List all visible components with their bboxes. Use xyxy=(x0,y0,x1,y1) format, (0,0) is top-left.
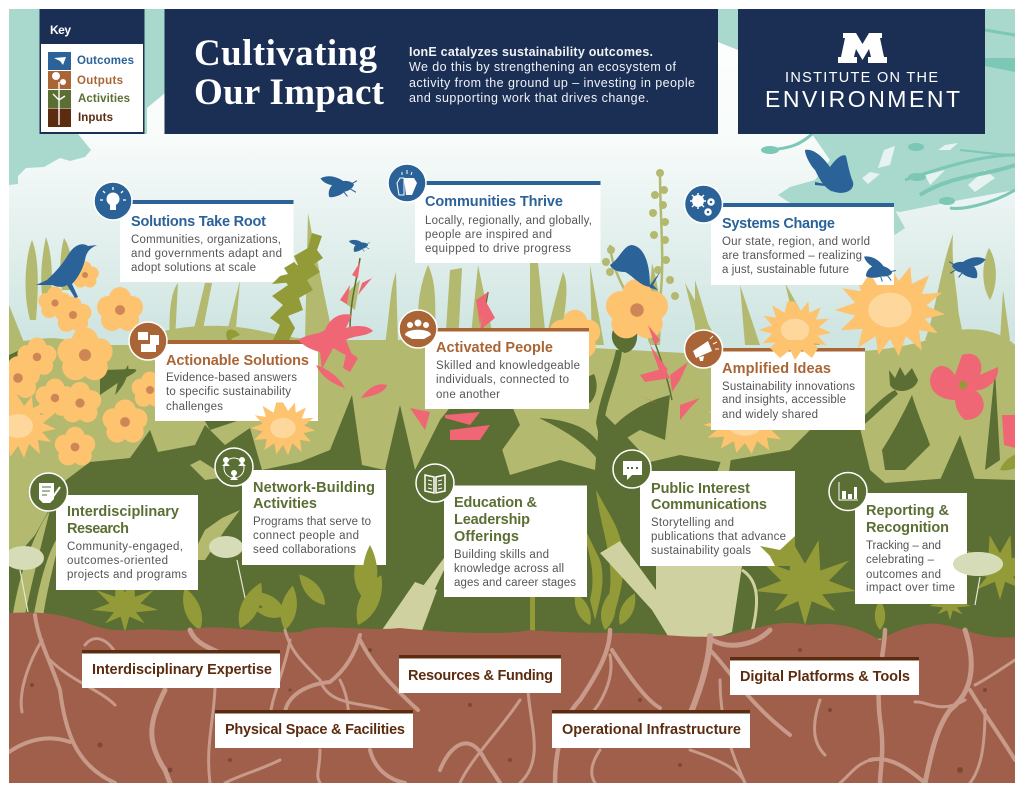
logo text xyxy=(766,72,960,107)
body text xyxy=(131,234,282,274)
icon: watering can xyxy=(600,541,757,642)
card: interdisciplinary research xyxy=(30,473,198,590)
card: amplified ideas xyxy=(684,330,865,430)
card: network-building activities xyxy=(215,448,386,565)
input: digital platforms and tools xyxy=(730,657,919,695)
body text: seed collaborations xyxy=(253,544,356,556)
card: activated people xyxy=(399,310,589,409)
daisy over card xyxy=(251,402,315,455)
garden leaves and seedlings xyxy=(183,565,886,630)
background grass blades xyxy=(9,213,1010,345)
heading: Actionable Solutions xyxy=(166,353,309,369)
body text: equipped to drive progress xyxy=(425,243,571,255)
input: resources and funding xyxy=(399,655,561,693)
card: solutions take root xyxy=(94,182,294,282)
soil specks xyxy=(30,648,987,773)
panel: institute logo xyxy=(738,9,985,134)
body text xyxy=(722,236,870,276)
body text: Communities, organizations, xyxy=(131,234,281,246)
plant tags xyxy=(4,536,1003,612)
heading: Network-Building xyxy=(253,480,375,496)
body text: Storytelling and xyxy=(651,517,734,529)
dark olive back plant xyxy=(226,233,323,340)
pink flowers xyxy=(340,262,1015,448)
body text: celebrating – xyxy=(866,554,935,566)
body text: adopt solutions at scale xyxy=(131,262,256,274)
card: reporting and recognition xyxy=(829,472,967,604)
panel: title banner xyxy=(164,9,718,134)
icon: shovel xyxy=(382,558,444,636)
roots xyxy=(9,615,1015,783)
body text: outcomes-oriented xyxy=(67,555,168,567)
body text: are transformed – realizing xyxy=(722,250,862,262)
plant over solutions card xyxy=(272,262,304,284)
heading: Offerings xyxy=(454,529,519,545)
body text: and insights, accessible xyxy=(722,394,846,406)
heading: Amplified Ideas xyxy=(722,361,831,377)
body text: Programs that serve to xyxy=(253,516,371,528)
butterfly middle xyxy=(610,245,660,290)
key labels: Outputs xyxy=(77,75,123,87)
intro text: activity from the ground up – investing in people xyxy=(409,76,695,90)
heading xyxy=(454,495,538,545)
heading xyxy=(866,503,950,536)
heading: Communities Thrive xyxy=(425,194,563,210)
logo text: ENVIRONMENT xyxy=(765,86,960,112)
body text: sustainability goals xyxy=(651,545,751,557)
input: digital platforms and tools: Digital Platforms & Tools xyxy=(740,669,910,685)
heading xyxy=(67,504,179,537)
body text: one another xyxy=(436,389,500,401)
foreground dark green mass xyxy=(9,395,1015,639)
red flower centre xyxy=(959,381,967,389)
thin plant stems xyxy=(350,258,672,400)
heading: Activities xyxy=(253,496,317,512)
bee top xyxy=(321,177,357,197)
heading: Communications xyxy=(651,497,767,513)
body text: publications that advance xyxy=(651,531,786,543)
body text: Sustainability innovations xyxy=(722,381,855,393)
icon: speech bubble xyxy=(613,450,651,488)
body text xyxy=(67,541,187,581)
heading: Interdisciplinary xyxy=(67,504,179,520)
intro text: and supporting work that drives change. xyxy=(409,91,649,105)
logo: block M xyxy=(838,33,887,63)
daisy petals over amplified bar xyxy=(770,340,818,360)
daisies xyxy=(0,266,945,458)
body text: challenges xyxy=(166,401,223,413)
card: systems change xyxy=(684,185,894,285)
body text: and widely shared xyxy=(722,409,818,421)
body text: Building skills and xyxy=(454,549,549,561)
icon: puzzle xyxy=(129,322,167,360)
bee right 2 xyxy=(949,258,985,278)
key heading: Key xyxy=(50,23,71,37)
pink flower over card xyxy=(298,314,387,398)
body text: Locally, regionally, and globally, xyxy=(425,215,592,227)
body text: outcomes and xyxy=(866,569,941,581)
body text: a just, sustainable future xyxy=(722,264,849,276)
body text: and governments adapt and xyxy=(131,248,282,260)
panel: key xyxy=(40,9,144,134)
input: interdisciplinary expertise xyxy=(82,650,280,688)
bee over card xyxy=(859,255,897,285)
card: communities thrive xyxy=(388,164,600,263)
body text: impact over time xyxy=(866,582,955,594)
icon: people xyxy=(399,310,437,348)
body text: ages and career stages xyxy=(454,577,576,589)
soil xyxy=(9,613,1015,783)
body text: projects and programs xyxy=(67,569,187,581)
icon: raised hands xyxy=(388,164,426,202)
background: sky xyxy=(9,141,1015,353)
leaf over card xyxy=(760,536,795,566)
heading: Research xyxy=(67,521,129,537)
body text: to specific sustainability xyxy=(166,386,291,398)
body text: connect people and xyxy=(253,530,359,542)
body text: individuals, connected to xyxy=(436,374,569,386)
key labels: Activities xyxy=(78,93,130,105)
body text xyxy=(436,360,580,401)
body text xyxy=(253,516,371,556)
butterfly top right xyxy=(805,150,853,193)
body text: Tracking – and xyxy=(866,540,941,552)
leaf over network card xyxy=(363,545,377,600)
heading: Leadership xyxy=(454,512,530,528)
fern and frond leaves xyxy=(92,430,1024,632)
key labels xyxy=(77,55,134,124)
body text: Community-engaged, xyxy=(67,541,183,553)
input: resources and funding: Resources & Funding xyxy=(408,668,553,684)
heading xyxy=(253,480,375,512)
input: operational infrastructure: Operational Infrastructure xyxy=(562,722,741,738)
body text xyxy=(425,215,592,255)
heading: Systems Change xyxy=(722,216,835,232)
body text xyxy=(166,372,297,413)
tree canopy top left xyxy=(9,9,165,185)
icon: megaphone xyxy=(684,330,722,368)
tag over reporting card xyxy=(953,552,1003,576)
body text xyxy=(866,540,955,594)
dark green plants and buds xyxy=(9,318,1000,480)
body text: knowledge across all xyxy=(454,563,564,575)
heading: Public Interest xyxy=(651,481,750,497)
heading: Recognition xyxy=(866,520,949,536)
key swatches xyxy=(48,52,71,127)
card: public interest communications xyxy=(613,450,795,566)
card: education and leadership xyxy=(416,464,587,597)
icon: network xyxy=(215,448,253,486)
body text: Our state, region, and world xyxy=(722,236,870,248)
icon: gears xyxy=(684,185,722,223)
heading: Reporting & xyxy=(866,503,950,519)
icon: light bulb xyxy=(94,182,132,220)
card: actionable solutions xyxy=(129,322,318,421)
heading: Solutions Take Root xyxy=(131,214,266,230)
logo text: INSTITUTE ON THE xyxy=(785,70,938,86)
body text: Skilled and knowledgeable xyxy=(436,360,580,372)
left fronds xyxy=(13,460,240,614)
heading: Education & xyxy=(454,495,538,511)
heading xyxy=(651,481,767,513)
body text: Evidence-based answers xyxy=(166,372,297,384)
intro text: We do this by strengthening an ecosystem of xyxy=(409,60,677,74)
icon: bar chart xyxy=(829,472,867,510)
heading: Activated People xyxy=(436,340,553,356)
bee on stalk xyxy=(349,240,370,252)
body text xyxy=(722,381,855,421)
body text xyxy=(651,517,786,557)
title: Cultivating xyxy=(194,33,378,74)
input: physical space and facilities: Physical Space & Facilities xyxy=(225,722,405,738)
title: Our Impact xyxy=(194,72,385,113)
input: physical space and facilities xyxy=(215,710,413,748)
hill: light olive xyxy=(9,326,1015,640)
input: operational infrastructure xyxy=(552,710,750,748)
orange blossoms left xyxy=(0,261,668,465)
tree canopy top right xyxy=(718,9,1015,235)
input: interdisciplinary expertise: Interdisciplinary Expertise xyxy=(92,662,272,678)
title xyxy=(194,33,385,113)
intro text: IonE catalyzes sustainability outcomes. xyxy=(409,45,653,59)
body text: people are inspired and xyxy=(425,229,552,241)
bird xyxy=(36,244,97,298)
intro text xyxy=(409,45,695,105)
key labels: Inputs xyxy=(78,112,113,124)
body text xyxy=(454,549,576,589)
icon: document check xyxy=(30,473,68,511)
key labels: Outcomes xyxy=(77,55,134,67)
daisy over systems card xyxy=(862,273,880,290)
icon: book xyxy=(416,464,454,502)
background plant stalk xyxy=(602,169,679,300)
